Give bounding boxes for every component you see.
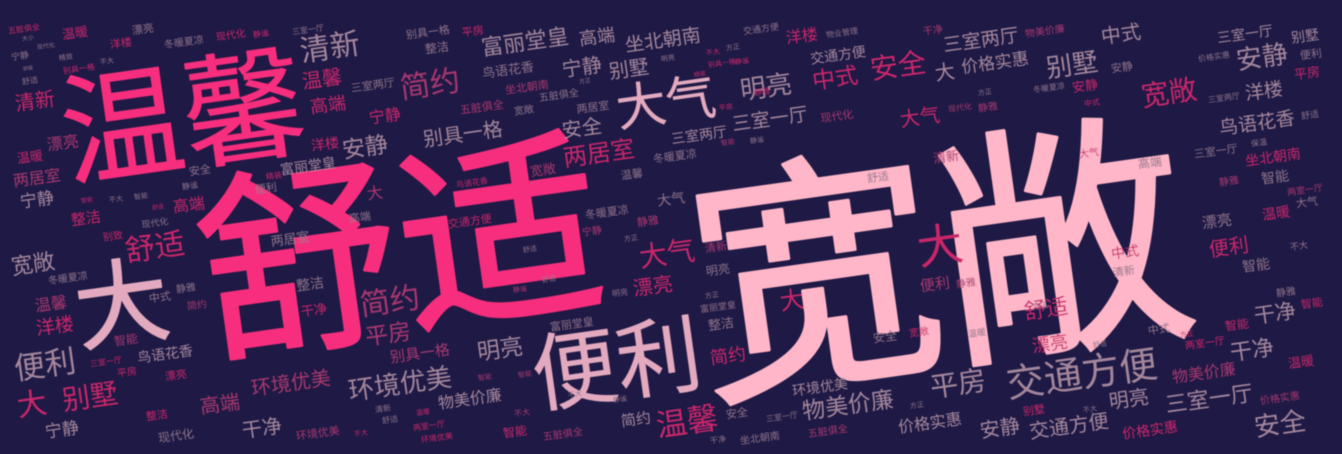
medium words: 简约 xyxy=(398,64,462,106)
small words: 精致 xyxy=(58,52,73,62)
small words: 智能 xyxy=(720,137,735,147)
small words: 保温 xyxy=(1250,136,1268,149)
small words: 两室一厅 xyxy=(412,418,445,433)
small words: 不大 xyxy=(99,56,114,66)
medium words: 平房 xyxy=(928,365,988,403)
medium words: 价格实惠 xyxy=(960,49,1030,77)
small words: 宁静 xyxy=(581,223,603,239)
medium words: 价格实惠 xyxy=(1121,418,1179,442)
medium words: 舒适 xyxy=(123,227,187,269)
medium words: 舒适 xyxy=(1022,294,1070,324)
medium words: 高端 xyxy=(309,93,347,117)
small words: 静雅 xyxy=(1218,173,1240,189)
small words: 现代化 xyxy=(157,427,195,445)
small words: 静谧 xyxy=(181,179,199,192)
medium words: 宽敞 xyxy=(9,249,57,279)
small words: 明亮 xyxy=(705,260,731,279)
medium words: 环境优美 xyxy=(346,362,454,406)
small words: 漂亮 xyxy=(164,367,188,383)
word: 温馨: 温馨 xyxy=(53,35,313,203)
medium words: 三室一厅 xyxy=(1164,380,1254,418)
medium words: 明亮 xyxy=(738,69,794,105)
small words: 鸟语花香 xyxy=(481,59,535,81)
medium words: 简约 xyxy=(709,344,747,368)
small words: 整洁 xyxy=(145,407,169,423)
word: 舒适: 舒适 xyxy=(183,111,617,393)
small words: 智能 xyxy=(80,195,93,205)
small words: 智能 xyxy=(502,422,528,441)
small words: 价格实惠 xyxy=(1259,389,1301,407)
medium words: 别墅 xyxy=(1290,26,1320,46)
small words: 高端 xyxy=(172,194,206,217)
small words: 简约 xyxy=(186,297,208,313)
small words: 整洁 xyxy=(707,315,735,333)
small words: 高端 xyxy=(348,209,372,225)
small words: 智能 xyxy=(1260,167,1290,187)
small words: 明亮 xyxy=(660,53,675,63)
small words: 温馨 xyxy=(34,293,68,316)
medium words: 鸟语花香 xyxy=(1218,107,1296,140)
small words: 中式 xyxy=(148,290,172,305)
small words: 宽敞 xyxy=(529,161,557,179)
medium words: 两居室 xyxy=(12,166,62,191)
small words: 大气 xyxy=(1078,145,1100,161)
small words: 方正 xyxy=(623,233,638,243)
medium words: 别墅 xyxy=(608,55,650,84)
small words: 平房 xyxy=(1293,64,1321,82)
medium words: 安静 xyxy=(340,131,390,163)
medium words: 大 xyxy=(933,60,956,85)
small words: 交通方便 xyxy=(742,21,780,36)
small words: 两室一厅 xyxy=(1184,334,1226,352)
small words: 大气 xyxy=(656,189,686,209)
medium words: 交通方便 xyxy=(1028,410,1110,443)
medium words: 简约 xyxy=(620,409,652,431)
small words: 别致 xyxy=(102,228,124,244)
small words: 价格实惠 xyxy=(1197,49,1230,64)
small words: 静雅 xyxy=(636,213,660,229)
medium words: 宁静 xyxy=(19,188,55,212)
medium words: 干净 xyxy=(1253,300,1297,328)
small words: 两居室 xyxy=(270,229,310,249)
small words: 平房 xyxy=(461,24,485,39)
small words: 五脏俱全 xyxy=(538,86,580,104)
medium words: 洋楼 xyxy=(1244,78,1284,105)
medium words: 物美价廉 xyxy=(801,386,895,424)
small words: 精装 xyxy=(693,69,706,79)
small words: 智能 xyxy=(1224,315,1250,334)
small words: 清新 xyxy=(1112,263,1136,279)
small words: 冬暖夏凉 xyxy=(584,202,630,222)
small words: 别具一格 xyxy=(62,61,95,76)
small words: 别具一格 xyxy=(389,341,451,367)
medium words: 物美价廉 xyxy=(437,386,503,413)
small words: 不大 xyxy=(1289,239,1309,252)
small words: 三室一厅 xyxy=(765,409,798,424)
medium words: 交通方便 xyxy=(1004,344,1160,406)
medium words: 环境优美 xyxy=(791,375,849,399)
small words: 坐北朝南 xyxy=(504,78,550,97)
small words: 两室一厅 xyxy=(1286,182,1324,197)
small words: 现代化 xyxy=(141,215,169,230)
medium words: 坐北朝南 xyxy=(624,24,702,57)
small words: 物美价廉 xyxy=(1024,22,1066,40)
small words: 三室一厅 xyxy=(1193,141,1239,161)
small words: 整洁 xyxy=(70,208,102,230)
small words: 方正 xyxy=(578,76,591,86)
small words: 坐北朝南 xyxy=(739,429,781,447)
small words: 方正 xyxy=(1179,329,1194,339)
medium words: 简约 xyxy=(358,281,422,323)
small words: 三室两厅 xyxy=(350,75,396,95)
small words: 不大 xyxy=(567,389,582,399)
medium words: 宽敞 xyxy=(1139,74,1199,112)
medium words: 温馨 xyxy=(654,400,720,444)
medium words: 大 xyxy=(914,217,966,275)
medium words: 高端 xyxy=(578,25,616,49)
medium words: 三室一厅 xyxy=(731,103,809,136)
medium words: 别具一格 xyxy=(422,118,504,151)
medium words: 洋楼 xyxy=(35,313,75,340)
small words: 两居室 xyxy=(576,98,610,116)
medium words: 干净 xyxy=(241,414,283,443)
small words: 精装 xyxy=(265,169,283,182)
small words: 洋楼 xyxy=(310,134,340,154)
small words: 五脏俱全 xyxy=(7,21,40,36)
small words: 三室一厅 xyxy=(291,22,324,37)
small words: 便利 xyxy=(919,274,951,296)
medium words: 宁静 xyxy=(44,418,80,442)
medium words: 大气 xyxy=(637,235,697,273)
medium words: 交通方便 xyxy=(809,43,867,67)
medium words: 便利 xyxy=(12,343,78,387)
small words: 大 xyxy=(366,183,384,204)
small words: 冬暖夏凉 xyxy=(1032,80,1065,95)
small words: 舒适 xyxy=(1300,108,1320,121)
small words: 洋楼 xyxy=(109,35,133,51)
small words: 干净 xyxy=(922,22,944,38)
small words: 大小 xyxy=(21,33,34,43)
small words: 干净 xyxy=(300,301,328,319)
small words: 现代化 xyxy=(947,101,973,114)
small words: 安全 xyxy=(725,405,749,421)
small words: 温暖 xyxy=(415,407,430,417)
medium words: 宁静 xyxy=(561,53,603,82)
small words: 漂亮 xyxy=(131,21,155,37)
small words: 温暖 xyxy=(1287,353,1315,371)
small words: 静雅 xyxy=(1275,284,1297,300)
medium words: 富丽堂皇 xyxy=(279,154,337,178)
small words: 舒适 xyxy=(21,74,39,87)
small words: 三室两厅 xyxy=(1207,90,1240,105)
small words: 舒适 xyxy=(866,169,890,185)
small words: 冬暖夏凉 xyxy=(652,146,698,166)
small words: 中式 xyxy=(1110,242,1140,262)
small words: 整洁 xyxy=(424,38,450,57)
small words: 不大 xyxy=(513,406,531,419)
small words: 智能 xyxy=(113,330,139,349)
medium words: 大气 xyxy=(899,103,941,132)
small words: 智能 xyxy=(1300,295,1324,311)
small words: 静谧 xyxy=(749,135,764,145)
small words: 宁静 xyxy=(368,105,402,128)
small words: 冬暖夏凉 xyxy=(47,269,89,287)
medium words: 安静 xyxy=(979,414,1021,443)
medium words: 漂亮 xyxy=(1031,332,1069,356)
small words: 温暖 xyxy=(61,24,89,42)
small words: 别具一格 xyxy=(405,22,451,42)
small words: 智能 xyxy=(477,372,492,382)
small words: 别具一格 xyxy=(707,57,736,69)
small words: 交通方便 xyxy=(447,211,493,231)
small words: 五脏俱全 xyxy=(807,422,849,440)
small words: 鸟语花香 xyxy=(136,342,194,366)
small words: 温暖 xyxy=(967,326,987,339)
small words: 宁静 xyxy=(10,49,30,62)
small words: 现代化 xyxy=(36,41,55,51)
small words: 富丽堂皇 xyxy=(699,299,737,314)
medium words: 安全 xyxy=(868,47,928,85)
medium words: 清新 xyxy=(298,27,362,69)
medium words: 富丽堂皇 xyxy=(480,23,570,61)
small words: 温暖 xyxy=(16,148,44,166)
small words: 明亮 xyxy=(611,286,629,299)
medium words: 便利 xyxy=(1208,233,1250,262)
medium words: 高端 xyxy=(199,390,241,419)
word: 宽敞: 宽敞 xyxy=(673,91,1207,437)
medium words: 三室一厅 xyxy=(1216,22,1274,46)
small words: 清新 xyxy=(704,239,728,255)
medium words: 别墅 xyxy=(1044,47,1100,83)
medium words: 漂亮 xyxy=(632,272,674,301)
medium words: 物美价廉 xyxy=(1171,360,1237,387)
small words: 静雅 xyxy=(753,85,771,98)
small words: 不大 xyxy=(108,194,123,204)
medium words: 明亮 xyxy=(475,333,525,365)
small words: 漂亮 xyxy=(46,132,80,155)
medium words: 明亮 xyxy=(1108,385,1150,414)
small words: 平房 xyxy=(718,102,733,112)
medium words: 别墅 xyxy=(60,378,120,416)
small words: 便利 xyxy=(1299,47,1323,62)
small words: 安静 xyxy=(1071,77,1099,95)
word: 大: 大 xyxy=(68,246,176,364)
small words: 温暖 xyxy=(1261,203,1291,223)
small words: 舒适 xyxy=(541,274,556,284)
small words: 舒服 xyxy=(22,64,33,73)
small words: 静雅 xyxy=(977,99,999,115)
small words: 静雅 xyxy=(955,275,977,291)
small words: 安全 xyxy=(188,162,212,178)
medium words: 安静 xyxy=(1234,39,1290,75)
small words: 宽敞 xyxy=(513,102,535,118)
small words: 温馨 xyxy=(620,166,644,182)
small words: 大气 xyxy=(1295,194,1319,210)
small words: 方正 xyxy=(909,400,924,410)
medium words: 中式 xyxy=(1100,20,1142,49)
small words: 清新 xyxy=(374,402,392,415)
small words: 安静 xyxy=(1110,59,1134,75)
medium words: 温馨 xyxy=(301,65,343,94)
small words: 别墅 xyxy=(1022,403,1046,418)
medium words: 干净 xyxy=(1228,335,1276,365)
small words: 平房 xyxy=(116,364,138,380)
small words: 环境优美 xyxy=(295,423,341,443)
small words: 静谧 xyxy=(734,56,749,66)
small words: 舒适 xyxy=(522,244,537,254)
small words: 静谧 xyxy=(612,394,627,404)
small words: 不大 xyxy=(705,47,720,57)
small words: 高端 xyxy=(1137,153,1163,172)
small words: 智能 xyxy=(1241,255,1271,275)
medium words: 安全 xyxy=(561,114,603,143)
medium words: 平房 xyxy=(363,318,413,350)
small words: 现代化 xyxy=(215,26,247,44)
small words: 智能 xyxy=(133,191,148,201)
small words: 中式 xyxy=(1083,96,1101,109)
small words: 不大 xyxy=(1082,404,1097,414)
small words: 鸟语花香 xyxy=(455,175,488,190)
small words: 漂亮 xyxy=(1201,211,1233,233)
small words: 方正 xyxy=(1031,299,1049,312)
small words: 清新 xyxy=(932,148,960,166)
small words: 方正 xyxy=(977,87,992,97)
medium words: 三室两厅 xyxy=(670,123,728,147)
medium words: 三室两厅 xyxy=(942,24,1020,57)
small words: 干净 xyxy=(709,433,727,446)
small words: 方正 xyxy=(725,42,740,52)
small words: 静雅 xyxy=(175,280,197,296)
medium words: 环境优美 xyxy=(250,367,332,400)
medium words: 大 xyxy=(15,387,49,423)
small words: 舒适 xyxy=(151,202,164,212)
small words: 富丽堂皇 xyxy=(549,314,595,334)
medium words: 价格实惠 xyxy=(897,410,963,437)
medium words: 清新 xyxy=(14,87,56,116)
medium words: 坐北朝南 xyxy=(1244,145,1302,169)
small words: 方正 xyxy=(704,290,719,300)
small words: 冬暖夏凉 xyxy=(163,33,205,51)
medium words: 两居室 xyxy=(561,136,637,172)
small words: 舒适 xyxy=(381,413,399,426)
small words: 宽敞 xyxy=(908,324,930,340)
medium words: 安全 xyxy=(1252,406,1308,442)
small words: 五脏俱全 xyxy=(459,97,505,117)
word: 便利: 便利 xyxy=(526,307,708,425)
small words: 智能 xyxy=(517,369,532,379)
small words: 便利 xyxy=(254,181,278,196)
small words: 物业管理 xyxy=(825,25,858,40)
small words: 环境优美 xyxy=(420,430,453,445)
small words: 安全 xyxy=(872,327,898,346)
small words: 整洁 xyxy=(295,274,325,294)
small words: 五脏俱全 xyxy=(542,425,584,443)
word: 大气: 大气 xyxy=(613,68,719,138)
medium words: 洋楼 xyxy=(785,25,819,48)
small words: 不大 xyxy=(353,428,368,438)
small words: 现代化 xyxy=(820,107,854,125)
small words: 舒适 xyxy=(1092,339,1107,349)
small words: 静谧 xyxy=(512,284,527,294)
small words: 三室一厅 xyxy=(89,354,122,369)
medium words: 中式 xyxy=(810,62,860,94)
small words: 中式 xyxy=(1147,322,1171,337)
medium words: 大 xyxy=(778,286,806,316)
small words: 静谧 xyxy=(252,27,270,40)
